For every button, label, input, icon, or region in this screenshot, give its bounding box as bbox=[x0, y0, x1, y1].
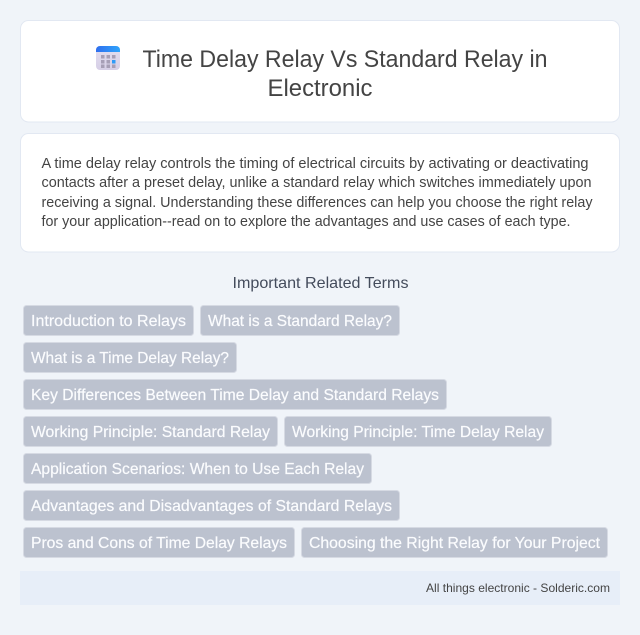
tag: application scenarios: Application Scenarios: When to Use Each Relay bbox=[31, 461, 364, 478]
tag: introduction: Introduction to Relays bbox=[31, 313, 186, 330]
tag: choosing: Choosing the Right Relay for Your Project bbox=[309, 535, 601, 552]
description text: contacts after a preset delay, unlike a standard relay which switches immediately upon bbox=[42, 175, 592, 191]
tag: working principle time delay: Working Principle: Time Delay Relay bbox=[292, 424, 544, 441]
title: Time Delay Relay Vs Standard Relay in bbox=[142, 46, 548, 73]
description text bbox=[42, 156, 593, 230]
description text: for your application--read on to explore the advantages and use cases of each type. bbox=[42, 214, 570, 230]
tag: standard relay bbox=[200, 306, 400, 336]
tag: time delay relay: What is a Time Delay Relay? bbox=[31, 350, 229, 367]
tag: time delay relay bbox=[24, 342, 236, 372]
tag: advantages bbox=[24, 490, 400, 520]
title bbox=[142, 46, 548, 102]
tag: working principle standard bbox=[24, 416, 278, 446]
footer bbox=[20, 571, 620, 605]
footer: All things electronic - Solderic.com bbox=[426, 581, 610, 595]
panel: description card bbox=[20, 134, 620, 252]
title: Electronic bbox=[268, 75, 372, 102]
panel: title card bbox=[20, 20, 620, 122]
description text: A time delay relay controls the timing of electrical circuits by activating or deactivating bbox=[42, 156, 588, 172]
tag: introduction bbox=[24, 306, 194, 336]
tag: key differences: Key Differences Between Time Delay and Standard Relays bbox=[31, 387, 439, 404]
tag: key differences bbox=[24, 380, 446, 410]
tag: working principle standard: Working Principle: Standard Relay bbox=[31, 424, 270, 441]
heading: related terms: Important Related Terms bbox=[232, 275, 408, 292]
tag list bbox=[24, 306, 608, 558]
tag: application scenarios bbox=[24, 454, 372, 484]
tag: choosing bbox=[302, 528, 608, 558]
tag: pros and cons bbox=[24, 528, 294, 558]
icon: calendar bbox=[96, 46, 120, 70]
tag: advantages: Advantages and Disadvantages of Standard Relays bbox=[31, 498, 392, 515]
tag: standard relay: What is a Standard Relay? bbox=[208, 313, 392, 330]
tag: pros and cons: Pros and Cons of Time Delay Relays bbox=[31, 535, 287, 552]
description text: receiving a signal. Understanding these differences can help you choose the right relay bbox=[42, 195, 593, 211]
tag: working principle time delay bbox=[284, 416, 552, 446]
